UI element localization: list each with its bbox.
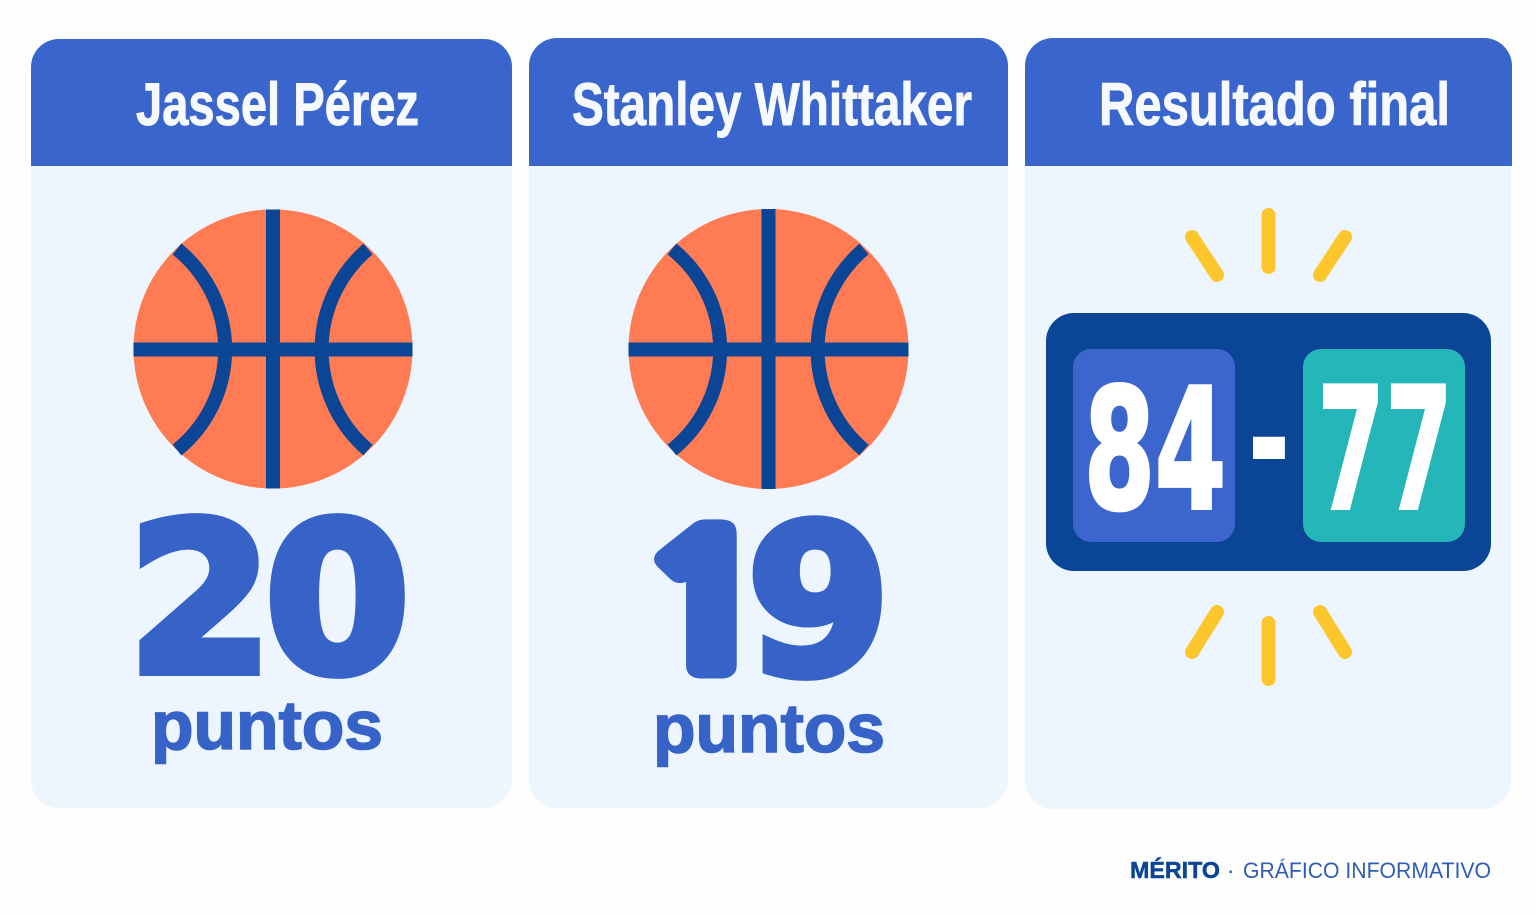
icon: basketball	[134, 210, 412, 488]
header bar: Resultado final	[1025, 38, 1512, 166]
header bar: Stanley Whittaker	[529, 38, 1008, 166]
footer credit: MÉRITO	[1130, 856, 1220, 883]
number: 19 points: 1	[642, 514, 772, 696]
footer credit: GRÁFICO INFORMATIVO	[1243, 858, 1491, 883]
number: 19 points	[642, 482, 890, 722]
panel: Stanley Whittaker	[529, 38, 1008, 808]
heading: Resultado final: Resultado final	[1099, 71, 1450, 138]
number: 20 points: 20	[128, 480, 410, 720]
icon: top sparkle rays	[1192, 215, 1345, 275]
score box: 77	[1303, 349, 1465, 550]
footer credit	[1130, 856, 1491, 883]
panel: Jassel Pérez	[31, 39, 512, 808]
header bar: Jassel Pérez	[31, 39, 512, 166]
score box: 84: 84	[1084, 354, 1226, 548]
score box: 84	[1073, 349, 1235, 548]
label: puntos: puntos	[151, 687, 383, 764]
number: 19 points: 9	[747, 482, 890, 722]
footer credit: ·	[1227, 858, 1234, 883]
heading: Stanley Whittaker: Stanley Whittaker	[572, 71, 972, 138]
heading: Jassel Pérez: Jassel Pérez	[136, 71, 419, 138]
separator dash: -	[1249, 339, 1289, 529]
panel: Resultado final	[1025, 38, 1512, 809]
scoreboard	[1046, 313, 1491, 571]
label: puntos: puntos	[653, 690, 885, 767]
icon: basketball	[628, 209, 908, 489]
icon: bottom sparkle rays	[1192, 612, 1345, 679]
